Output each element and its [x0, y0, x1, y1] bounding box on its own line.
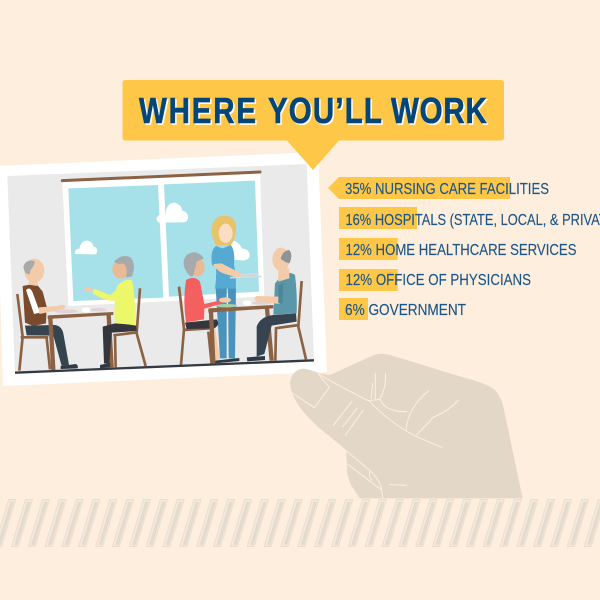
row: government: 6% GOVERNMENT — [345, 302, 466, 319]
left table with plates — [48, 307, 113, 370]
decorative stripe band — [0, 499, 600, 547]
cloud left — [75, 241, 97, 254]
illustration: dining room scene — [7, 164, 314, 373]
title banner — [122, 80, 504, 170]
row: office of physicians — [339, 269, 531, 291]
hand holding photo — [290, 354, 523, 498]
row: government — [339, 298, 466, 320]
banner shape with pointer — [122, 80, 504, 170]
floor line — [15, 360, 314, 373]
title text: WHERE — [139, 90, 268, 131]
card paper — [0, 152, 327, 386]
cloud centre — [156, 203, 188, 223]
left man and chair — [17, 259, 78, 371]
cloud right — [230, 241, 250, 260]
title text: YOU’LL — [269, 92, 393, 132]
finger crease lines — [292, 373, 458, 498]
row: nursing care facilities: 35% NURSING CARE FACILITIES — [345, 181, 549, 198]
photo card — [0, 152, 327, 386]
woman in red and chair — [179, 252, 231, 365]
title text: YOU’LL — [268, 90, 392, 131]
window — [62, 172, 264, 306]
row: home healthcare — [339, 238, 576, 260]
nurse with tray — [211, 216, 262, 363]
title text: WORK — [391, 90, 488, 131]
workplace share list — [328, 177, 600, 320]
woman in yellow and chair — [84, 256, 146, 368]
right man and chair — [247, 248, 306, 361]
title text: WHERE — [140, 92, 269, 132]
right table with plates — [208, 300, 273, 363]
row: office of physicians: 12% OFFICE OF PHYSICIANS — [346, 272, 531, 289]
room wall — [7, 164, 314, 373]
title text: WORK — [392, 92, 489, 132]
title text — [139, 90, 489, 132]
hand silhouette — [290, 354, 523, 498]
row: nursing care facilities — [328, 177, 549, 199]
